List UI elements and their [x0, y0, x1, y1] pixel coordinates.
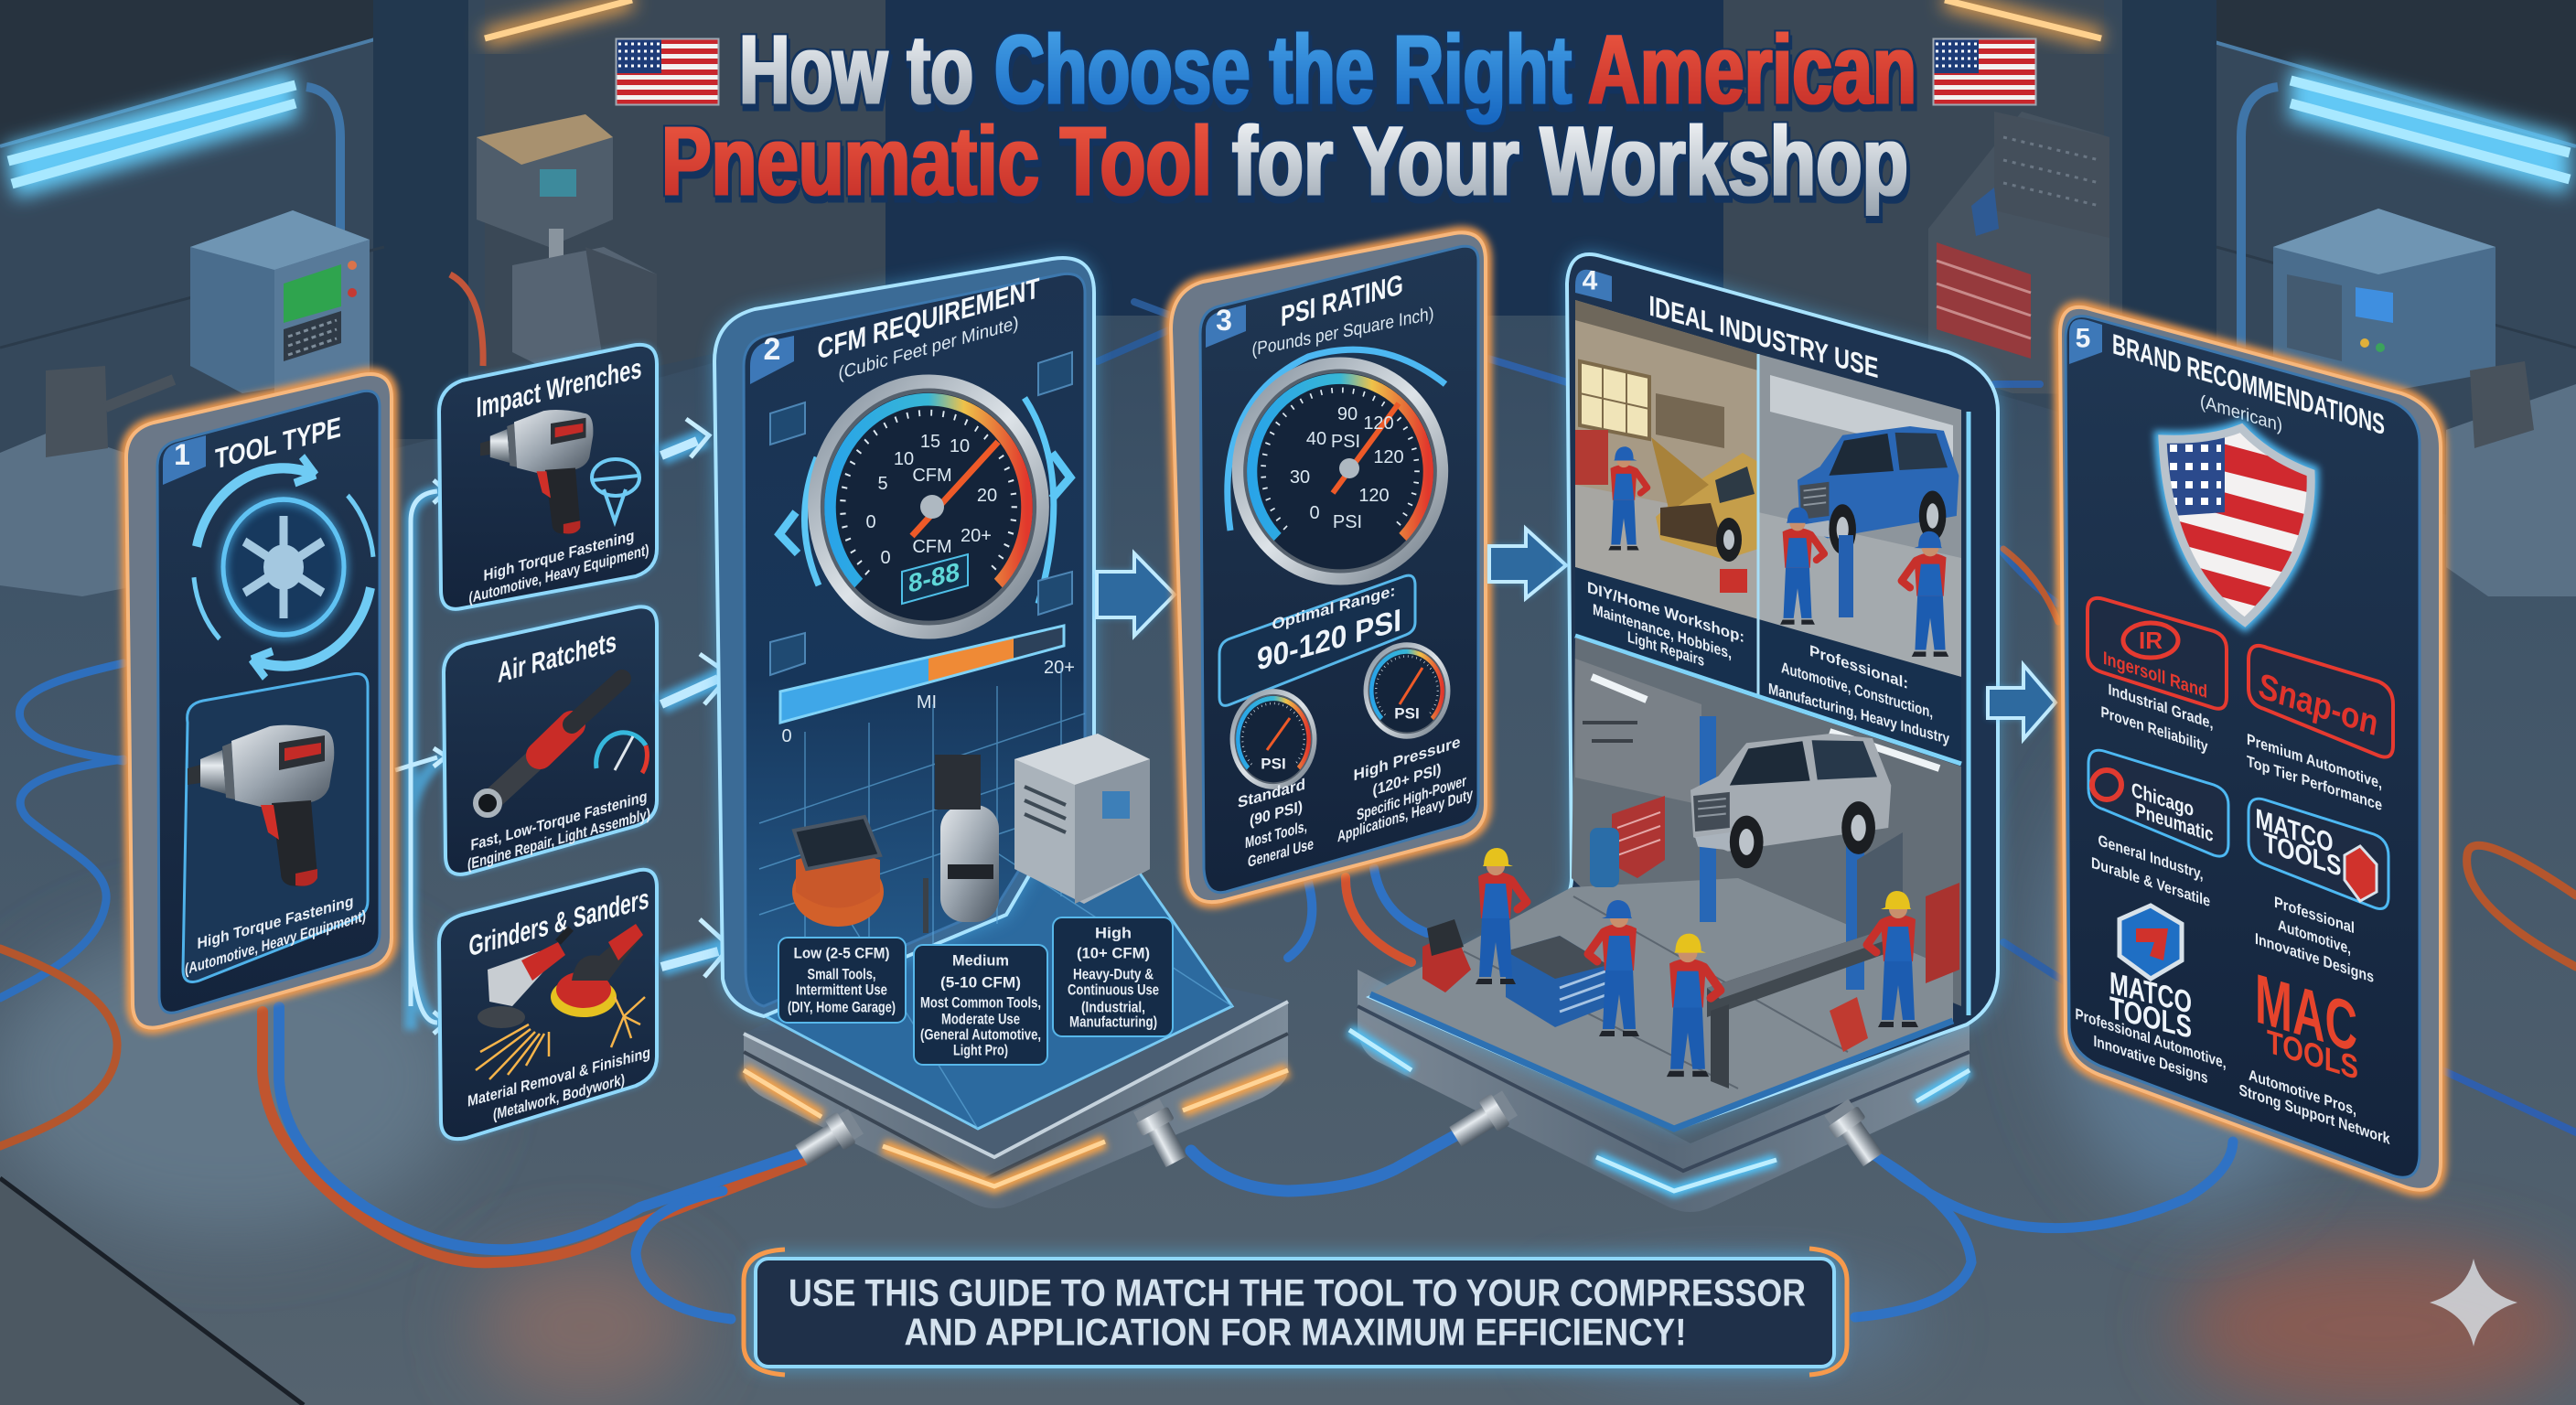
heading: brand recommendations: BRAND RECOMMENDATIONS: [2112, 327, 2385, 441]
scene: DIY home workshop: [1575, 300, 1758, 621]
card: air ratchets: Air Ratchets: [498, 625, 617, 689]
icon: gear with circular arrows: [194, 456, 373, 678]
card: high CFM: (10+ CFM): [1077, 944, 1150, 962]
PSI gauge: 40: [1306, 429, 1326, 449]
title text: Choose the Right: [994, 14, 1572, 124]
badge 1: 1: [174, 438, 190, 471]
PSI gauge: 0: [1309, 503, 1320, 523]
icon: orbital sander: [551, 924, 643, 1017]
card: high CFM: High: [1095, 924, 1132, 942]
brand: Matco Tools logo: Professional Automotive,: [2075, 1004, 2227, 1072]
small gauge: standard: PSI: [1261, 756, 1286, 772]
PSI gauge: [1228, 349, 1445, 579]
card: low CFM: Intermittent Use: [796, 981, 887, 999]
CFM gauge: 10: [950, 436, 970, 456]
card: impact wrench: [183, 674, 368, 982]
brand: Matco Tools box: TOOLS: [2263, 826, 2342, 883]
card: impact wrench: (Automotive, Heavy Equipment): [185, 906, 366, 978]
card: medium CFM: Medium: [952, 951, 1009, 970]
brand: Matco Tools box: Professional: [2274, 893, 2355, 937]
sparks: [476, 997, 645, 1079]
card: impact wrenches: High Torque Fastening: [483, 526, 635, 585]
caption: professional: Professional:: [1809, 641, 1908, 692]
brand: Matco Tools logo: [2075, 906, 2227, 1087]
icon: air ratchet: [476, 679, 622, 815]
CFM gauge: 20: [977, 486, 997, 506]
subheading: (American): [2200, 391, 2282, 436]
callout: optimal range: Optimal Range:: [1272, 581, 1396, 634]
PSI gauge: PSI: [1333, 512, 1362, 532]
badge 3: [1206, 304, 1246, 348]
brand: Matco Tools box: Automotive,: [2278, 916, 2351, 958]
badge 1: [163, 435, 206, 485]
compressor: medium: [926, 755, 999, 933]
arrows from tool cards to CFM panel: [661, 419, 730, 977]
card: high CFM: (Industrial,: [1081, 999, 1145, 1015]
CFM gauge: 0: [880, 548, 891, 568]
brand: Chicago Pneumatic: General Industry,: [2098, 831, 2203, 884]
watermark star: [2430, 1259, 2517, 1346]
platform under panel 2: [744, 805, 1288, 1208]
small side icons: [770, 352, 1072, 675]
worker: DIY: [1608, 446, 1648, 551]
badge 2: [750, 332, 794, 384]
card: high CFM: [1053, 917, 1173, 1036]
CFM bar: [780, 626, 1075, 746]
panel 4: ideal industry use: [1370, 254, 1998, 1130]
panel 5: brand recommendations: [2060, 307, 2441, 1190]
background: left machinery: [0, 114, 657, 596]
hose fittings: [792, 1088, 1888, 1171]
subheading: (Pounds per Square Inch): [1251, 304, 1434, 360]
text: high pressure: [1337, 732, 1473, 845]
bottom banner: [744, 1249, 1847, 1375]
brand: Mac Tools: Strong Support Network: [2239, 1080, 2390, 1148]
card: medium CFM: (General Automotive,: [920, 1026, 1041, 1043]
brand: Ingersoll Rand: [2088, 598, 2227, 756]
badge 4: [1575, 265, 1612, 302]
brand: Ingersoll Rand: Proven Reliability: [2101, 702, 2208, 756]
compressor: low: [792, 817, 884, 927]
text: standard: Most Tools,: [1245, 817, 1307, 852]
background: light tubes: [8, 0, 2570, 384]
text: standard: (90 PSI): [1250, 797, 1303, 830]
card: impact wrenches: [439, 345, 657, 609]
card: low CFM: Small Tools,: [807, 966, 876, 982]
card: grinders and sanders: Grinders & Sanders: [469, 882, 649, 962]
title text: [661, 14, 1916, 216]
badge 5: [2069, 319, 2102, 364]
badge 2: 2: [764, 332, 780, 367]
arrow: panel 4 to panel 5: [1988, 665, 2055, 739]
hoses on the floor: [0, 302, 2576, 1319]
brand: Snap-on: Top Tier Performance: [2247, 752, 2382, 814]
card: medium CFM: Light Pro): [953, 1041, 1008, 1059]
card: air ratchets: (Engine Repair, Light Assembly): [467, 804, 650, 874]
heading: PSI rating: PSI RATING: [1281, 267, 1403, 333]
CFM gauge: 15: [920, 432, 940, 452]
CFM bar: 20+: [1044, 658, 1075, 678]
PSI gauge: 120: [1363, 413, 1394, 434]
divider and caption band: [1575, 354, 1961, 768]
text: standard: Standard: [1238, 775, 1305, 811]
callout: optimal range: 90-120 PSI: [1257, 603, 1401, 678]
icon: impact wrench: [480, 410, 593, 534]
small gauge: high pressure: [1366, 645, 1448, 736]
card: high CFM: Heavy-Duty &: [1073, 966, 1154, 982]
platform under panel 4: [1349, 970, 1970, 1212]
flag right: [1933, 38, 2036, 105]
CFM gauge: 10: [894, 449, 914, 469]
title text: American: [1588, 14, 1916, 124]
brand: Mac Tools: Automotive Pros,: [2249, 1066, 2356, 1119]
badge 3: 3: [1216, 304, 1232, 337]
brand: Matco Tools box: [2249, 799, 2388, 986]
card: low CFM: [778, 938, 906, 1023]
bottom banner: USE THIS GUIDE TO MATCH THE TOOL TO YOUR COMPRESSOR: [789, 1271, 1806, 1314]
text: high pressure: (120+ PSI): [1372, 759, 1442, 799]
brand: Snap-on: [2247, 646, 2393, 814]
heading: tool type: TOOL TYPE: [215, 410, 341, 476]
text: high pressure: Applications, Heavy Duty: [1337, 784, 1473, 845]
icon: torque outline: [592, 459, 639, 521]
callout: optimal range: [1219, 575, 1415, 705]
lift posts: [1700, 716, 1864, 990]
brand: Chicago Pneumatic: Durable & Versatile: [2091, 853, 2210, 910]
card: air ratchets: Fast, Low-Torque Fastening: [470, 787, 648, 854]
workers: shop floor: [1476, 848, 1918, 1077]
PSI gauge: 120: [1358, 486, 1390, 506]
card: grinders and sanders: [439, 870, 657, 1139]
CFM gauge: CFM: [912, 466, 952, 486]
portable compressors: [1422, 919, 1868, 1052]
workers: professional shop: [1780, 508, 1948, 657]
caption: professional: Manufacturing, Heavy Industry: [1768, 679, 1949, 748]
CFM gauge: 8-88: [908, 557, 960, 599]
compressor: high: [1014, 734, 1150, 904]
brand: Matco Tools logo: TOOLS: [2109, 991, 2192, 1046]
blue tool chest: [1506, 936, 1608, 1027]
caption: professional: Automotive, Construction,: [1781, 658, 1933, 722]
PSI gauge: PSI: [1331, 432, 1360, 452]
small gauge: high pressure: PSI: [1394, 704, 1420, 723]
icon: impact wrench: [188, 725, 334, 886]
brand: Matco Tools logo: MATCO: [2109, 966, 2192, 1021]
heading: ideal industry use: IDEAL INDUSTRY USE: [1648, 289, 1879, 384]
card: impact wrench: High Torque Fastening: [198, 892, 353, 952]
badge 4: 4: [1583, 265, 1598, 296]
PSI gauge: 30: [1290, 467, 1310, 488]
icon: American flag shield: [2159, 421, 2319, 627]
icon: angle grinder: [478, 928, 571, 1028]
brand: Ingersoll Rand: Industrial Grade,: [2108, 680, 2214, 733]
title text: How to: [739, 14, 973, 124]
car: yellow classic: [1651, 437, 1758, 562]
caption: professional: [1768, 641, 1949, 748]
title text: Pneumatic Tool: [661, 105, 1212, 216]
brand: Matco Tools logo: Innovative Designs: [2094, 1032, 2207, 1087]
card: grinders and sanders: Material Removal & Finishing: [467, 1043, 650, 1110]
card: medium CFM: Most Common Tools,: [920, 993, 1041, 1012]
card: low CFM: Low (2-5 CFM): [794, 944, 889, 962]
heading: CFM requirement: CFM REQUIREMENT: [818, 271, 1039, 366]
card: low CFM: (DIY, Home Garage): [788, 999, 896, 1015]
brand: Matco Tools box: MATCO: [2256, 802, 2333, 859]
arrow: panel 2 to panel 3: [1097, 553, 1175, 636]
truck: silver on lift: [1690, 734, 1891, 868]
title: [616, 14, 2036, 216]
bottom banner: AND APPLICATION FOR MAXIMUM EFFICIENCY!: [904, 1310, 1687, 1354]
brand: Mac Tools: [2239, 960, 2390, 1148]
card: medium CFM: [914, 945, 1047, 1065]
panel 2: CFM requirement: [714, 258, 1232, 1129]
title text: for Your Workshop: [1232, 105, 1908, 216]
panel 1: tool type: [126, 374, 392, 1028]
CFM gauge: 5: [877, 474, 888, 494]
truck: blue on lift: [1798, 426, 1959, 554]
scene: professional shop: [1758, 354, 1961, 677]
brand: Chicago Pneumatic: Chicago: [2131, 778, 2194, 820]
connector arrows from tool type panel to tool cards: [395, 480, 446, 1034]
small gauge: standard: [1232, 692, 1315, 787]
flag left: [616, 38, 719, 105]
CFM gauge: [779, 381, 1070, 632]
floor grid: [759, 668, 1232, 1129]
brand: Mac Tools: MAC: [2255, 960, 2357, 1067]
PSI gauge: 90: [1337, 404, 1358, 424]
brand: Ingersoll Rand: IR: [2139, 627, 2163, 654]
card: air ratchets: [444, 606, 657, 874]
brand: Snap-on: Snap-on: [2259, 664, 2377, 745]
text: high pressure: High Pressure: [1354, 732, 1461, 784]
text: standard: General Use: [1248, 834, 1314, 871]
icon: small gauge: [596, 733, 647, 773]
brand: Matco Tools box: Innovative Designs: [2255, 929, 2374, 986]
CFM bar: MI: [917, 692, 937, 713]
brand: Mac Tools: TOOLS: [2267, 1023, 2358, 1087]
CFM gauge: CFM: [912, 537, 952, 557]
card: medium CFM: (5-10 CFM): [940, 973, 1021, 992]
brand: Snap-on: Premium Automotive,: [2247, 730, 2382, 792]
card: medium CFM: Moderate Use: [941, 1010, 1020, 1028]
CFM bar: 0: [781, 726, 792, 746]
brand: Chicago Pneumatic: Pneumatic: [2135, 799, 2214, 846]
subheading: (Cubic Feet per Minute): [838, 313, 1019, 384]
card: high CFM: Continuous Use: [1068, 981, 1159, 999]
caption: DIY: Maintenance, Hobbies,: [1593, 600, 1732, 662]
text: high pressure: Specific High-Power: [1357, 771, 1466, 824]
card: impact wrenches: (Automotive, Heavy Equipment): [468, 541, 649, 606]
PSI gauge: 120: [1373, 447, 1404, 467]
card: grinders and sanders: (Metalwork, Bodywork): [493, 1070, 625, 1123]
steel beam: [1707, 928, 1894, 1089]
card: impact wrenches: Impact Wrenches: [476, 352, 642, 424]
cabinets and equipment: [1590, 796, 1959, 983]
background: right machinery: [1928, 112, 2576, 596]
CFM gauge: 20+: [961, 526, 992, 546]
brand: Ingersoll Rand: Ingersoll Rand: [2103, 648, 2207, 702]
card: high CFM: Manufacturing): [1069, 1014, 1157, 1030]
scene: shop floor: [1370, 638, 1961, 1129]
text: standard: [1238, 775, 1314, 871]
brand: Chicago Pneumatic: [2088, 750, 2228, 910]
CFM gauge: 0: [865, 512, 876, 532]
arrow: panel 3 to panel 4: [1489, 529, 1566, 598]
badge 5: 5: [2076, 324, 2090, 353]
caption: DIY: DIY/Home Workshop:: [1587, 578, 1744, 646]
caption: DIY: Light Repairs: [1627, 627, 1704, 670]
panel 3: PSI rating: [1171, 232, 1486, 902]
